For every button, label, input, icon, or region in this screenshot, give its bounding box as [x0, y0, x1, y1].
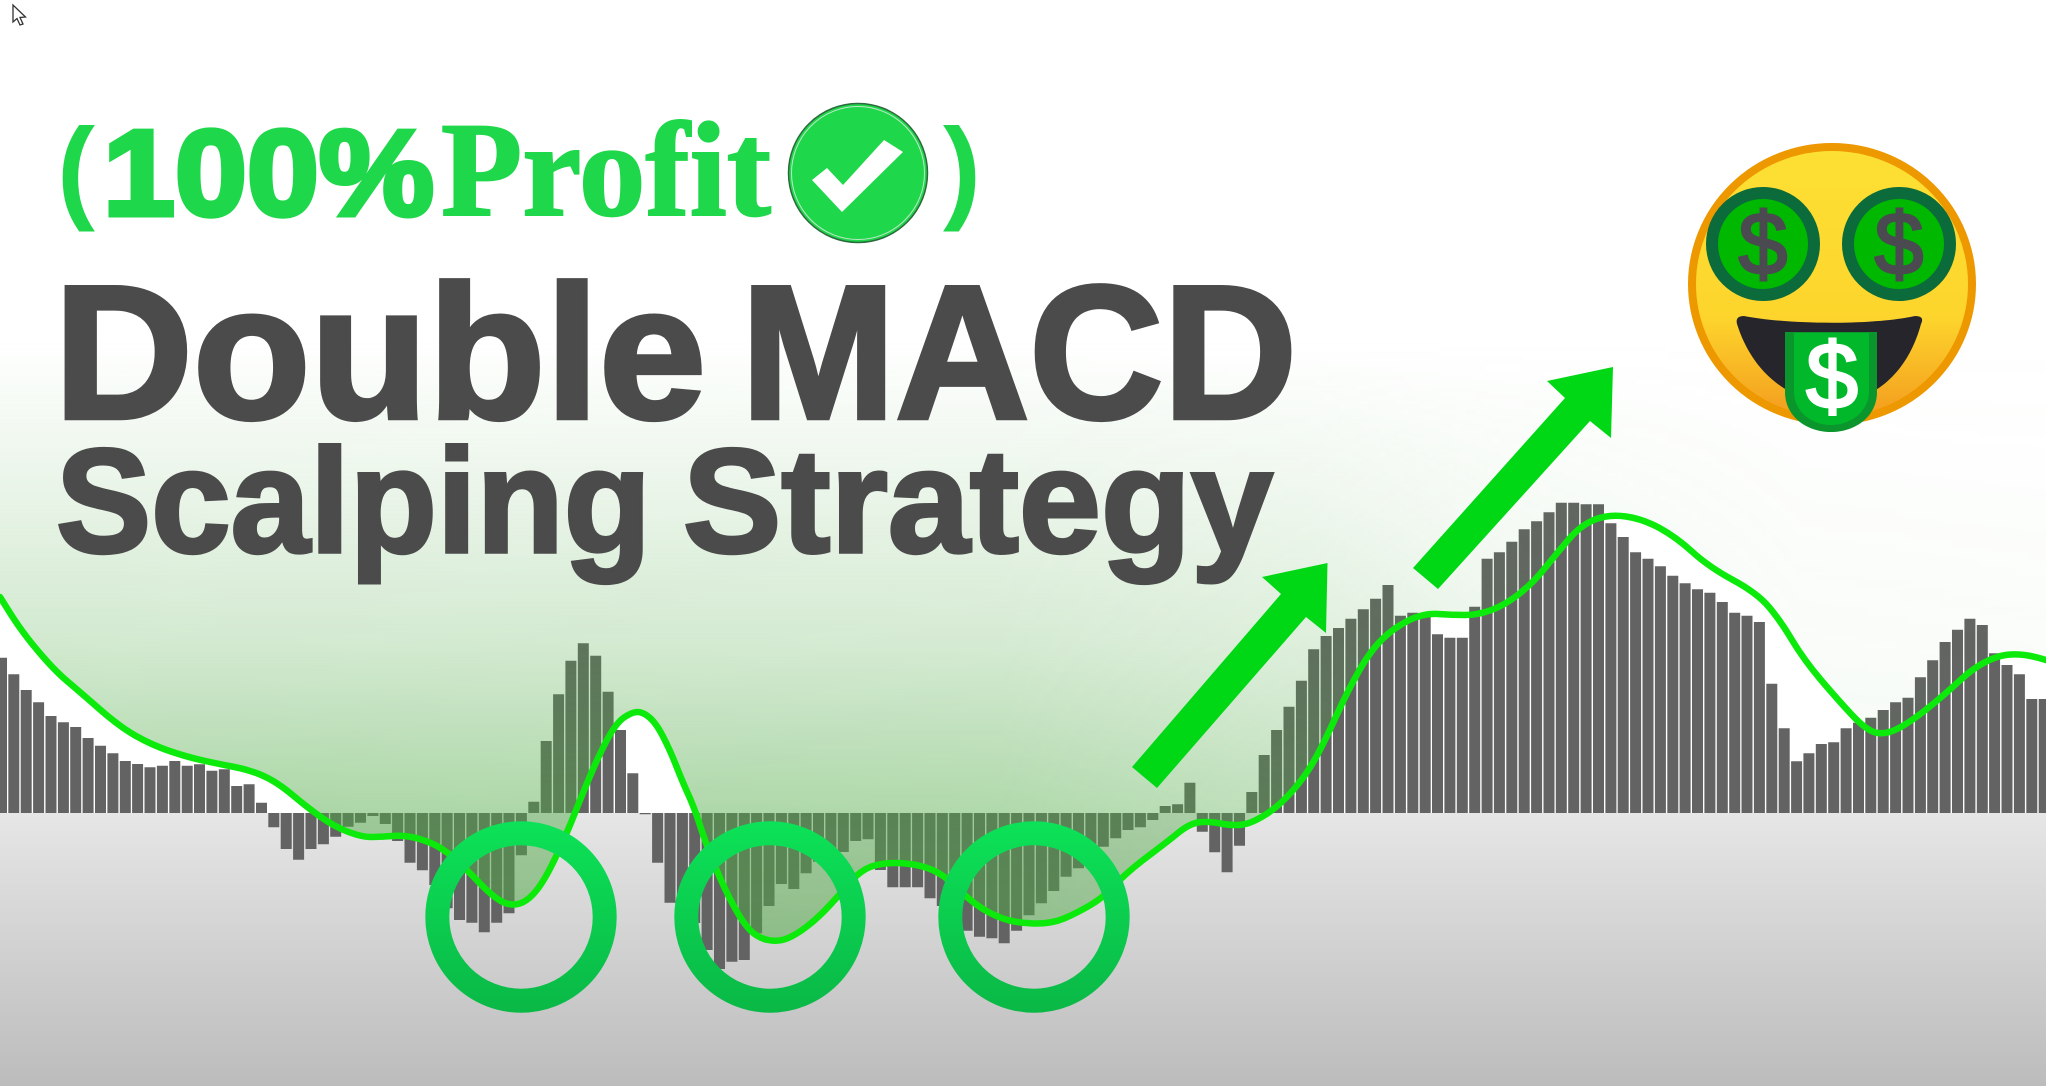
- 100 percent text: 100%: [103, 105, 434, 241]
- green gradient area above signal line: [0, 390, 1902, 938]
- circle highlight 1: [437, 833, 605, 1001]
- circle highlight 3: [950, 833, 1118, 1001]
- icon: money-mouth emoji: [1692, 147, 1972, 432]
- histogram bars: [0, 503, 2046, 969]
- signal line: [0, 516, 2046, 941]
- icon: money-mouth emoji: $: [1806, 323, 1858, 428]
- icon: green check badge: [788, 104, 928, 242]
- word Double: Double: [54, 247, 706, 459]
- icon: money-mouth emoji: $: [1875, 194, 1923, 293]
- opening parenthesis: (: [57, 106, 95, 233]
- icon: money-mouth emoji: $: [1739, 194, 1787, 293]
- heading: 100% Profit: [57, 96, 981, 245]
- word Profit: Profit: [441, 96, 771, 245]
- word MACD: MACD: [741, 247, 1297, 459]
- word Strategy: Strategy: [683, 419, 1273, 584]
- closing parenthesis: ): [943, 106, 981, 233]
- background below zero line: [0, 813, 2046, 1086]
- word Scalping: Scalping: [56, 419, 651, 584]
- arrow: upper up-trend arrow: [1413, 367, 1613, 589]
- title: Double MACD: [54, 247, 1297, 459]
- arrow: lower up-trend arrow: [1132, 563, 1328, 788]
- icon: mouse cursor: [13, 5, 26, 25]
- circle highlight 2: [686, 833, 854, 1001]
- subtitle: Scalping Strategy: [56, 419, 1273, 584]
